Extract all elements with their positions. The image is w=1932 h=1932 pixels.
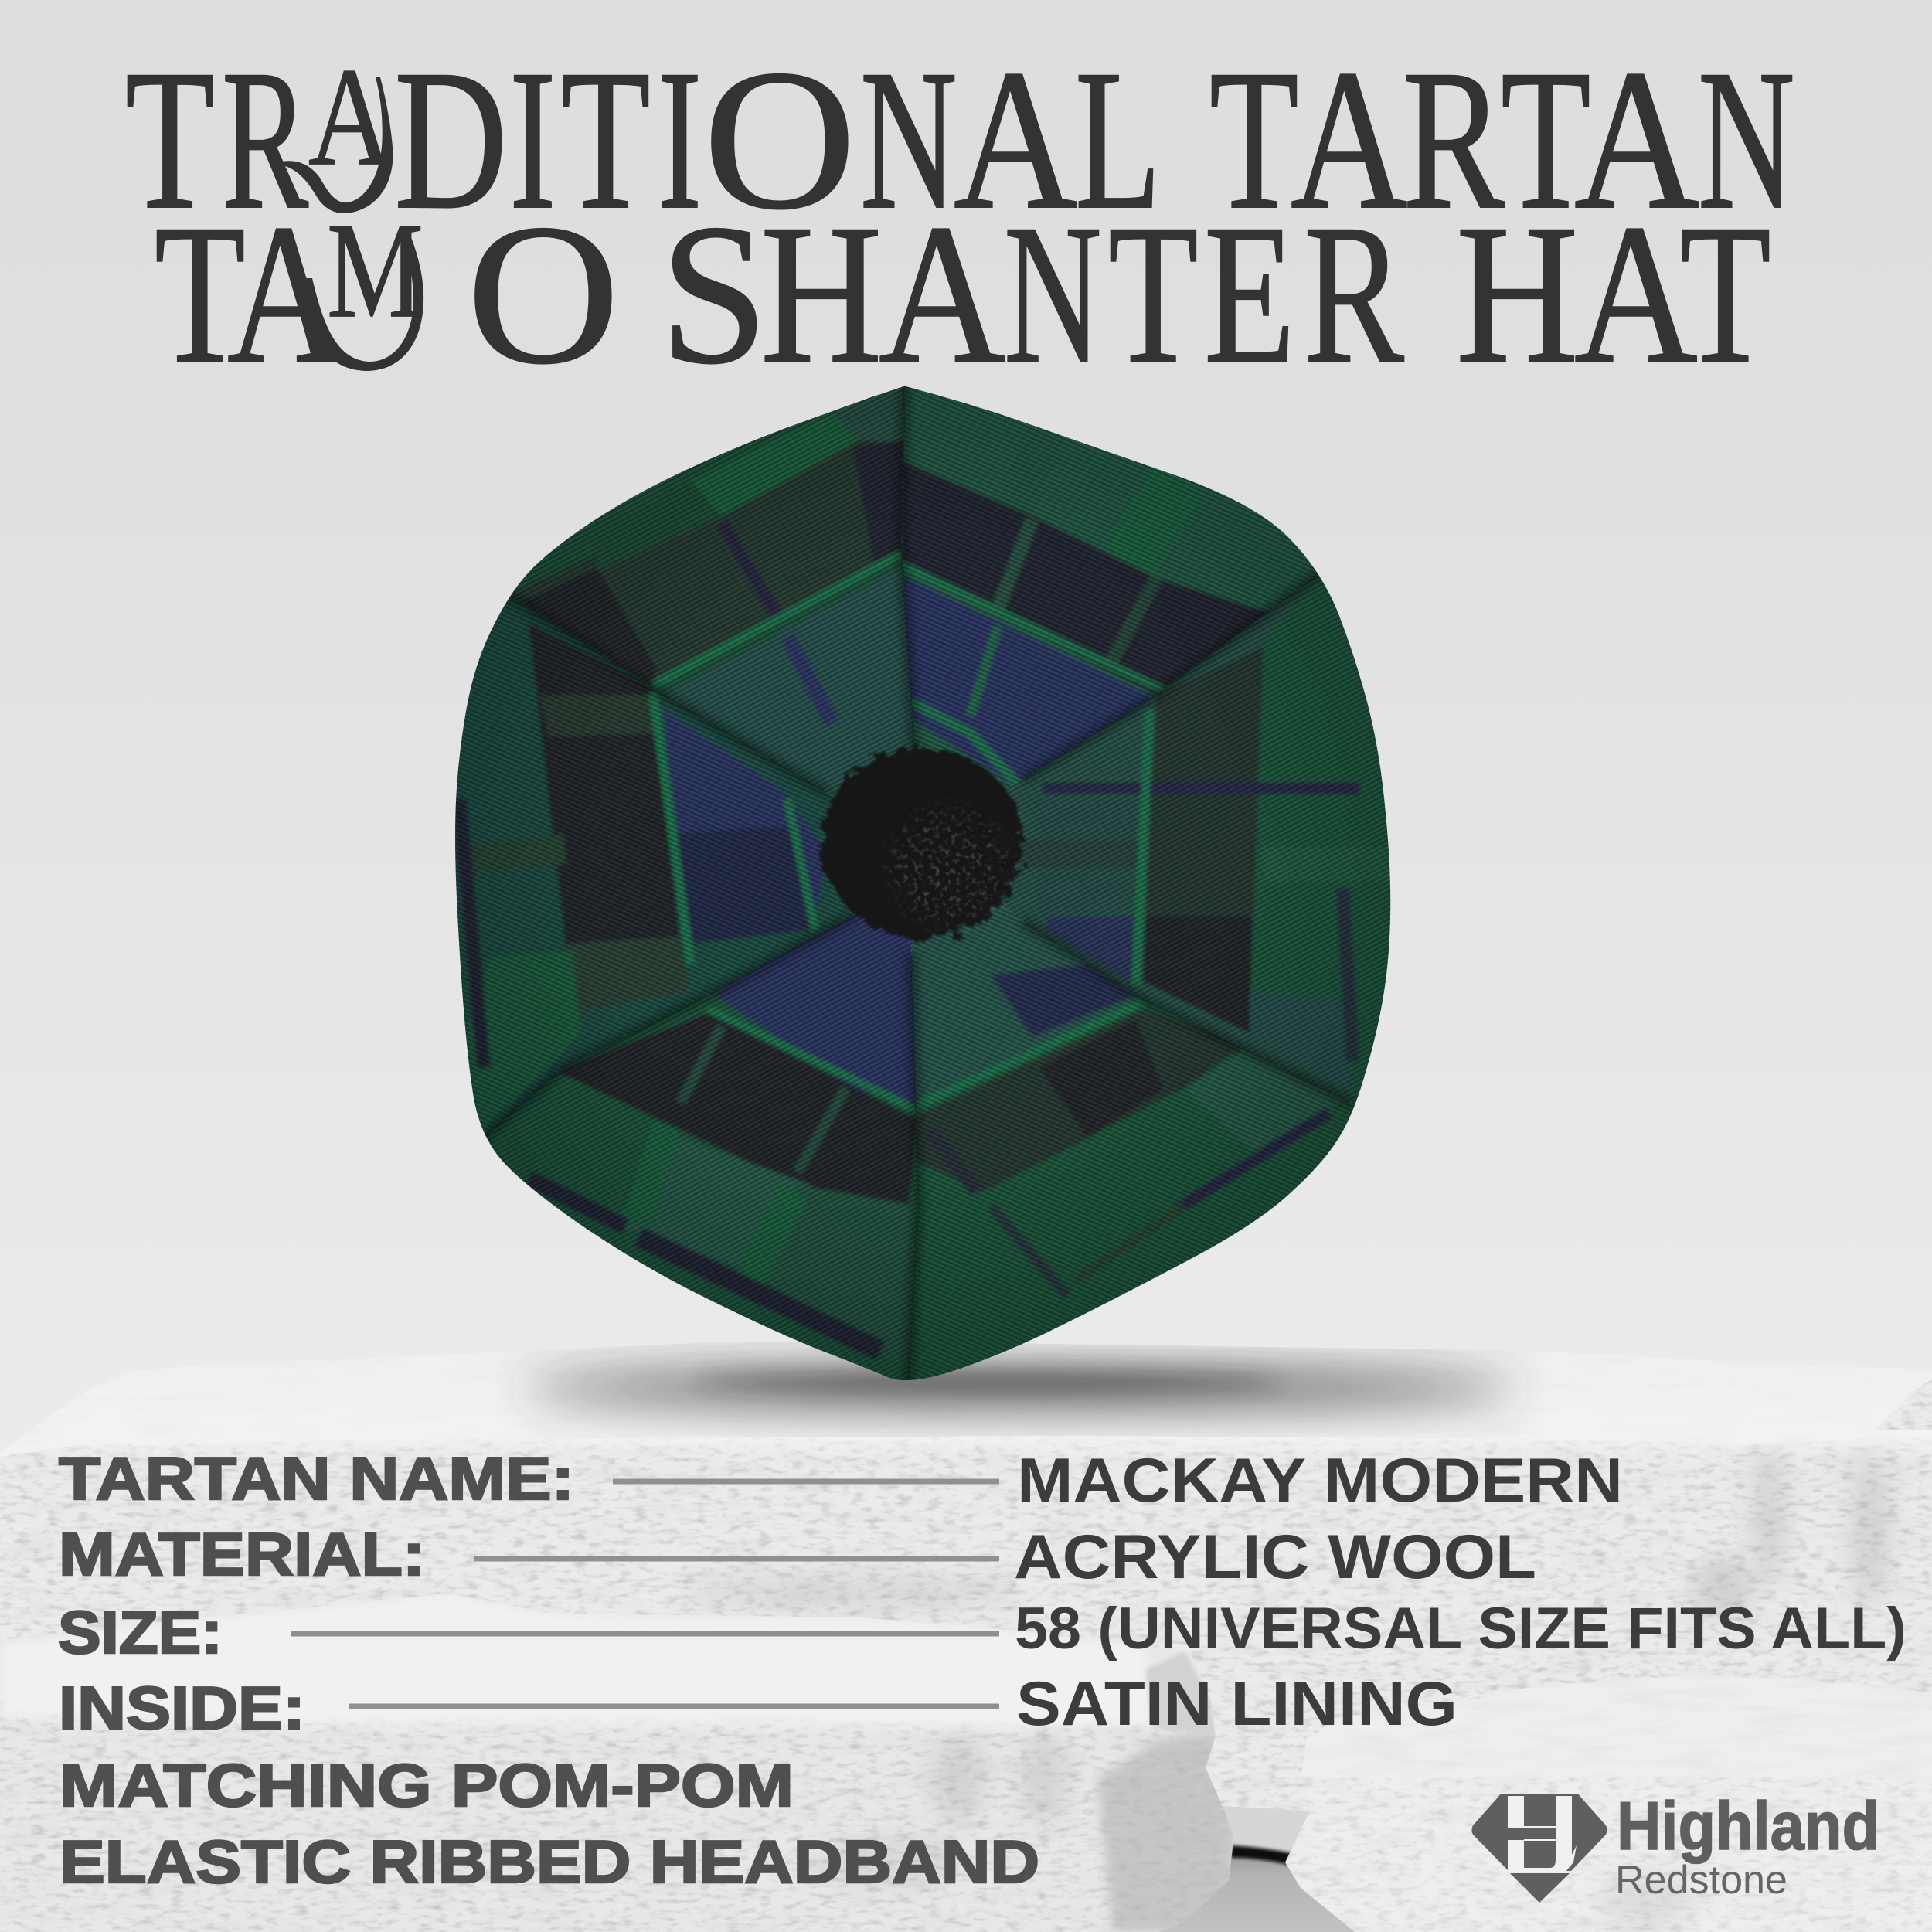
value: satin lining: SATIN LINING: [1016, 1669, 1458, 1739]
logo wordmark: Highland: [1617, 1787, 1879, 1864]
title: N: [860, 29, 957, 251]
value: acrylic wool: ACRYLIC WOOL: [1014, 1522, 1536, 1592]
title: A: [308, 39, 393, 195]
connector line 2: [474, 1556, 999, 1561]
rock: upper slab front face: [0, 1376, 1932, 1816]
label: inside: INSIDE:: [59, 1674, 305, 1742]
title: H: [760, 183, 882, 406]
title: T: [155, 183, 245, 406]
rock: lower left block: [0, 1584, 1252, 1932]
feature: matching pom-pom: MATCHING POM-POM: [60, 1751, 794, 1819]
title: T: [1108, 183, 1198, 406]
title: E: [1204, 183, 1295, 406]
title: O: [703, 29, 855, 251]
spec list: [58, 1444, 1906, 1896]
title swash: R into A: [272, 77, 393, 213]
title swash: A into M: [292, 226, 423, 371]
connector line 3: [291, 1631, 999, 1637]
logo mark: diamond: [1471, 1794, 1607, 1903]
hat panel: bottom left: [485, 913, 918, 1380]
title: A: [1291, 29, 1408, 251]
feature: elastic ribbed headband: ELASTIC RIBBED HEADBAND: [60, 1828, 1039, 1896]
logo subtitle: Redstone: [1615, 1858, 1787, 1903]
title: H: [1456, 183, 1579, 406]
label: size: SIZE:: [58, 1598, 223, 1666]
title: T: [561, 29, 650, 251]
connector line 4: [349, 1703, 999, 1709]
title: T: [125, 29, 214, 251]
title: S: [660, 183, 768, 406]
title: A: [227, 183, 342, 406]
rock: floor between blocks: [1082, 1839, 1406, 1932]
hat panel: left: [455, 597, 855, 1136]
title: N: [1698, 29, 1795, 251]
title: [125, 29, 1795, 406]
value: size: 58 (UNIVERSAL SIZE FITS ALL): [1015, 1596, 1906, 1662]
title: O: [467, 183, 619, 406]
title: I: [658, 29, 702, 251]
hat panel: right: [999, 574, 1391, 1102]
rock: rear ledge under slab: [1213, 1793, 1314, 1855]
pom-pom: [821, 748, 1023, 940]
hat panel: top left: [510, 386, 914, 800]
rock: upper slab top surface: [526, 1342, 1513, 1437]
title: T: [1501, 29, 1590, 251]
title: D: [394, 29, 508, 251]
title: T: [1680, 183, 1770, 406]
title: I: [509, 29, 556, 251]
title: A: [1574, 183, 1697, 406]
title: R: [1304, 183, 1404, 406]
value: mackay modern: MACKAY MODERN: [1017, 1446, 1623, 1515]
hat panel: bottom right: [909, 904, 1355, 1380]
label: material: MATERIAL:: [59, 1520, 425, 1588]
title: T: [1209, 29, 1298, 251]
title: A: [879, 183, 1005, 406]
title: R: [1403, 29, 1504, 251]
label: tartan name: TARTAN NAME:: [59, 1444, 574, 1512]
title: M: [327, 195, 423, 346]
rock: dark gap: [1231, 1845, 1292, 1866]
title: L: [1075, 29, 1161, 251]
logo: Highland Redstone: [1471, 1787, 1879, 1903]
hat: tartan tam o shanter: [455, 386, 1391, 1380]
title: R: [222, 29, 308, 251]
title: A: [954, 29, 1077, 251]
title: A: [1574, 29, 1699, 251]
connector line 1: [613, 1479, 999, 1484]
rock: lower right block: [1283, 1669, 1932, 1932]
hat panel: top right: [901, 386, 1318, 790]
title: N: [1004, 183, 1102, 406]
hat seams: [480, 386, 1349, 1385]
